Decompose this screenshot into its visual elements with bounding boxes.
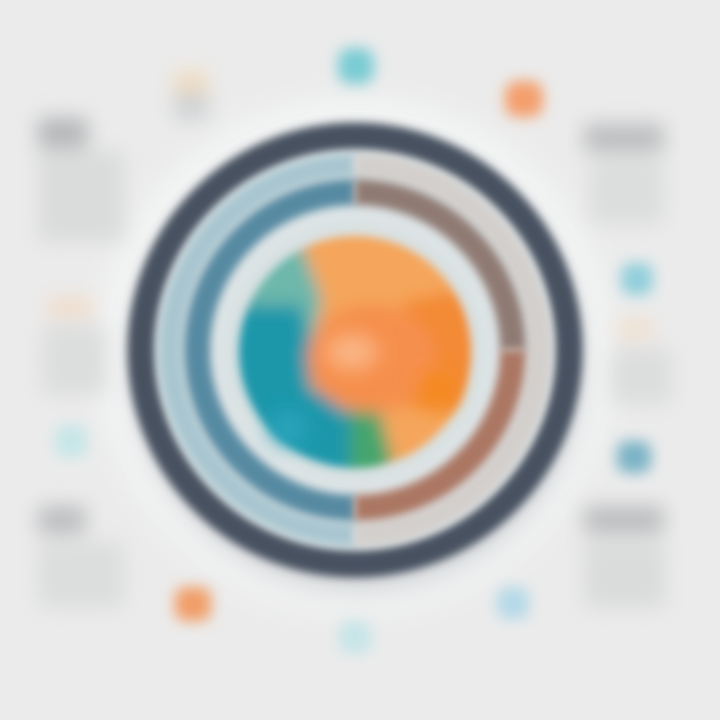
icon: left pale teal marker: [55, 425, 87, 457]
icon: right teal marker: [621, 263, 653, 295]
teal upper segment: [242, 244, 332, 346]
centre highlight: [326, 334, 378, 370]
icon: top right orange marker: [505, 81, 543, 117]
icon: top left beige marker: [174, 72, 208, 120]
green segment: [350, 405, 395, 490]
panel: top left text block: [38, 118, 124, 242]
terracotta arc lower right: [355, 350, 513, 508]
chart: central pie: [232, 230, 478, 476]
light orange segment: [292, 230, 460, 467]
outer pale ring right: [355, 165, 540, 535]
outer dark ring: [141, 136, 569, 564]
soft halo around chart: [97, 97, 613, 613]
teal blue segment: [232, 296, 367, 475]
deep orange segment: [401, 288, 474, 415]
icon: bottom pale teal marker: [339, 621, 371, 653]
icon: bottom right pale blue marker: [497, 587, 529, 619]
blue arc left: [197, 192, 355, 508]
inner fill of chart: [150, 145, 560, 555]
bright orange accent: [420, 372, 456, 408]
icon: top teal marker: [338, 48, 374, 84]
ring drop shadow: [134, 142, 582, 590]
panel: mid right text block: [612, 322, 672, 404]
chart: concentric rings: [134, 136, 582, 590]
infographic canvas: [28, 38, 672, 658]
centre orange blob: [308, 304, 436, 412]
panel: mid left text block: [42, 300, 106, 395]
bright teal accent: [270, 412, 306, 444]
panel: bottom right text block: [584, 506, 666, 608]
icon: bottom left orange marker: [175, 587, 211, 621]
brown arc upper right: [355, 192, 513, 350]
panel: top right text block: [584, 124, 664, 224]
icon: right blue marker: [617, 441, 651, 473]
outer pale ring left: [170, 165, 355, 535]
pale ring around disc: [225, 222, 485, 482]
panel: bottom left text block: [38, 506, 124, 608]
